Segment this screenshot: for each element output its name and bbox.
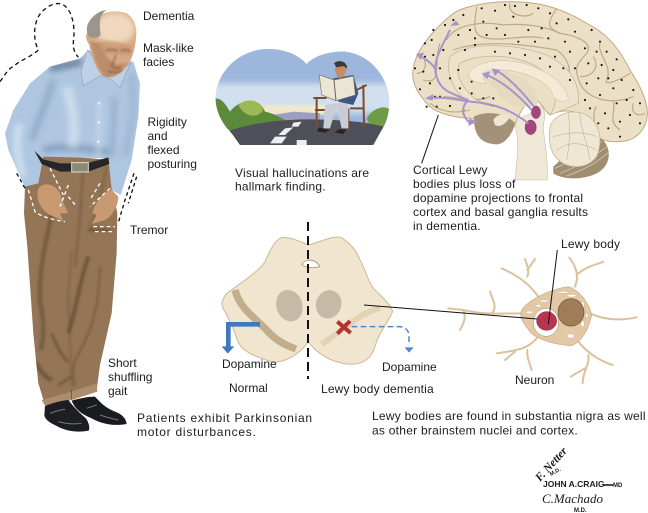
label: Lewy body dementia: Lewy body dementia xyxy=(321,382,434,396)
caption: cortical Lewy bodies: Cortical Lewy xyxy=(413,163,488,177)
signature: Craig degree: MD xyxy=(613,483,623,489)
viewer-right hand xyxy=(92,190,118,224)
label: gait: shuffling xyxy=(108,370,152,384)
road dash xyxy=(297,140,307,145)
dashed midline xyxy=(307,222,309,379)
red nucleus left xyxy=(272,286,307,325)
brainstem xyxy=(515,106,547,180)
leader line xyxy=(422,115,438,163)
road xyxy=(227,119,383,147)
Lewy body xyxy=(537,312,557,330)
leader line to Lewy body xyxy=(548,250,557,324)
panel: brain xyxy=(413,2,647,180)
label: tremor: Tremor xyxy=(130,223,168,237)
substantia nigra normal xyxy=(235,290,296,349)
viewer-left hand xyxy=(37,184,68,221)
signature: Netter degree: M.D. xyxy=(549,466,562,478)
caption: hallucinations: hallmark finding. xyxy=(235,180,326,194)
belt xyxy=(34,151,109,172)
collar xyxy=(81,50,131,87)
belt buckle xyxy=(72,163,88,172)
caption: cortical Lewy bodies: bodies plus loss of xyxy=(413,177,516,191)
cerebellum folia xyxy=(553,138,609,178)
dopamine nuclei xyxy=(531,106,541,119)
label: neuron: Neuron xyxy=(515,373,554,387)
temporal underside shading xyxy=(474,113,515,144)
label: rigidity: posturing xyxy=(148,157,197,171)
dashed posture outline xyxy=(0,4,78,82)
pathology dots xyxy=(415,5,640,137)
signature: Craig: JOHN A.CRAIG xyxy=(543,479,605,489)
bench xyxy=(313,85,367,130)
label: dementia: Dementia xyxy=(143,9,195,23)
label: mask-like facies: facies xyxy=(143,55,174,69)
caption: hallucinations: Visual hallucinations are xyxy=(235,166,369,180)
sky xyxy=(216,49,390,130)
panel: patient figure xyxy=(0,4,140,432)
red X marker xyxy=(337,321,351,334)
caption: motor disturbances: motor disturbances. xyxy=(137,425,257,439)
label: dopamine reduced: Dopamine xyxy=(382,360,437,374)
signature: Netter: F. Netter xyxy=(533,445,570,485)
hair xyxy=(87,10,107,38)
reduced dopamine dashed arrow xyxy=(352,327,414,353)
label: gait: gait xyxy=(108,384,128,398)
substantia nigra depleted xyxy=(322,308,380,344)
small white structures xyxy=(493,114,510,126)
leader line from section to neuron xyxy=(364,305,537,319)
shirt buttons xyxy=(94,103,103,142)
soma xyxy=(521,287,592,346)
label: mask-like facies: Mask-like xyxy=(143,41,194,55)
label: gait: Short xyxy=(108,356,137,370)
newspaper xyxy=(319,75,355,101)
tremor dashes on black xyxy=(17,173,137,223)
aqueduct xyxy=(302,260,320,268)
red nucleus right xyxy=(312,287,345,322)
trees xyxy=(215,98,285,132)
head xyxy=(86,11,136,78)
shoes xyxy=(44,397,127,432)
dendrites xyxy=(448,258,637,383)
label: rigidity: and xyxy=(148,129,168,143)
corpus callosum xyxy=(468,61,568,101)
panel: neuron xyxy=(448,250,637,383)
section outline xyxy=(222,237,393,364)
nucleus white halo xyxy=(533,308,559,336)
tremor motion dashes xyxy=(28,168,115,232)
brain outline xyxy=(413,2,647,144)
caption: cortical Lewy bodies: in dementia. xyxy=(413,219,481,233)
label: rigidity: flexed xyxy=(148,143,180,157)
caption: Lewy bodies: Lewy bodies are found in substantia nigra as well xyxy=(372,409,646,423)
panel: brainstem cross-section xyxy=(222,237,414,364)
projection arrows xyxy=(420,30,534,123)
label: Lewy body: Lewy body xyxy=(561,237,620,251)
label: rigidity: Rigidity xyxy=(148,115,187,129)
signature xyxy=(533,445,623,513)
label: dopamine normal: Dopamine xyxy=(222,357,277,371)
label: normal: Normal xyxy=(229,381,268,395)
cytoplasm vacuoles xyxy=(526,291,588,338)
panel: visual hallucination scene xyxy=(216,49,390,145)
caption: motor disturbances: Patients exhibit Parkinsonian xyxy=(137,411,313,425)
signature: Craig rule xyxy=(603,484,613,486)
cerebellum xyxy=(549,112,600,167)
caption: cortical Lewy bodies: dopamine projections to frontal xyxy=(413,191,583,205)
cingulate band xyxy=(449,46,578,115)
brown nucleus xyxy=(558,299,584,326)
shirt xyxy=(5,50,140,195)
seated man xyxy=(323,102,348,128)
normal dopamine arrow xyxy=(222,324,260,354)
caption: Lewy bodies: as other brainstem nuclei and cortex. xyxy=(372,423,578,437)
caption: cortical Lewy bodies: cortex and basal ganglia results xyxy=(413,205,588,219)
signature: Machado: C.Machado xyxy=(542,491,604,506)
trousers xyxy=(24,153,117,406)
sulci xyxy=(417,3,645,130)
thalamus region xyxy=(484,70,538,107)
